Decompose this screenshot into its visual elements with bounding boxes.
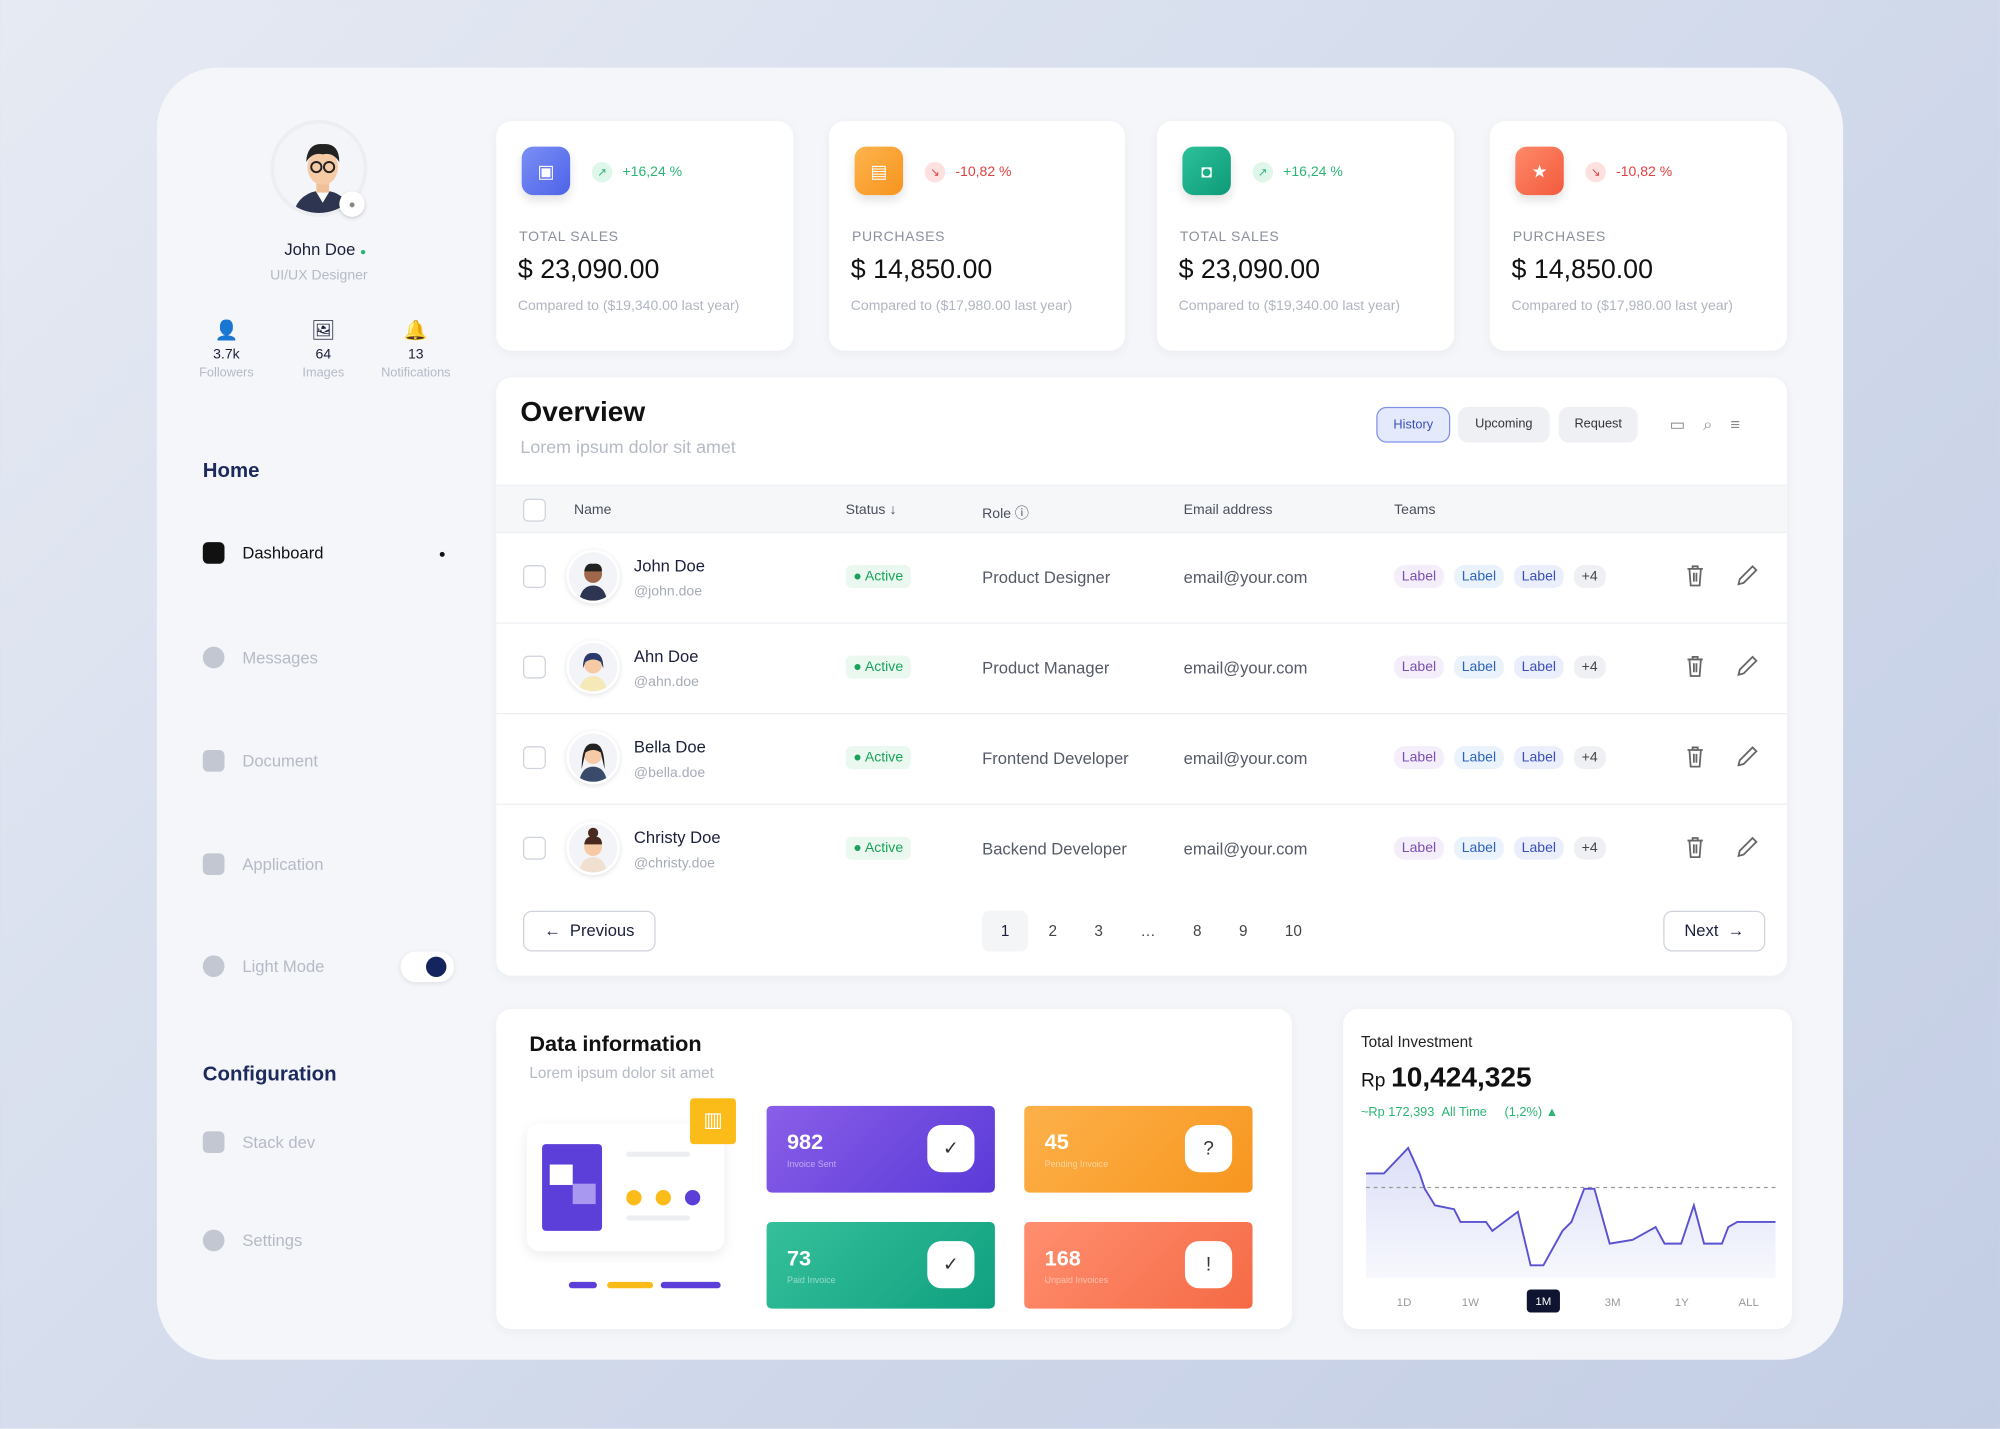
nav: application: [202, 853, 323, 875]
row: Bella Doe: @bella.doe: [634, 765, 705, 781]
profile stats: 🖼: [311, 320, 335, 342]
stat card 2: PURCHASES: [852, 230, 945, 245]
stat card 2: -10,82 %: [955, 165, 1012, 180]
row: John Doe: +4: [1582, 569, 1598, 584]
stat card 4: $ 14,850.00: [1511, 255, 1653, 284]
stat card 3: ↗: [1258, 166, 1268, 179]
stat card 4: Compared to ($17,980.00 last year): [1511, 298, 1733, 314]
heading: configuration: Configuration: [203, 1064, 337, 1085]
row: Christy Doe: ● Active: [853, 841, 903, 856]
sidebar profile: UI/UX Designer: [270, 268, 368, 283]
stat card 1: $ 23,090.00: [518, 255, 659, 284]
nav: messages: [202, 646, 318, 668]
row: Christy Doe: Label: [1522, 841, 1556, 856]
range tabs: 1D: [1397, 1296, 1411, 1309]
profile stats: Images: [302, 366, 344, 380]
stat card 2: [829, 121, 1125, 351]
overview title: Overview: [520, 395, 645, 427]
table header: Teams: [1394, 503, 1435, 518]
nav: document: Document: [242, 751, 318, 770]
nav: dashboard: Dashboard: [242, 543, 323, 562]
stat card 1: ▣: [537, 161, 554, 181]
name: John Doe ●: [284, 240, 366, 259]
row: Ahn Doe: email@your.com: [1184, 658, 1307, 677]
table header: Email address: [1184, 503, 1273, 518]
row: Christy Doe: +4: [1582, 841, 1598, 856]
nav: settings: Settings: [242, 1231, 302, 1250]
stat card 3: [1157, 121, 1454, 351]
metric: invoice sent: Invoice Sent: [787, 1161, 836, 1170]
stat card 3: TOTAL SALES: [1180, 230, 1279, 245]
panel: total investment: ALL: [1739, 1296, 1759, 1309]
sidebar profile: ●: [349, 198, 356, 210]
stat card 1: [496, 121, 793, 351]
profile stats: 3.7k: [213, 347, 240, 362]
nav: light mode: Light Mode: [242, 957, 324, 976]
main container: [157, 68, 1843, 1360]
nav: stack dev: [202, 1131, 315, 1153]
stat card 3: $ 23,090.00: [1179, 255, 1320, 284]
panel: total investment: 1Y: [1675, 1296, 1689, 1309]
stat card 3: ◘: [1201, 161, 1212, 181]
metric: invoice sent: 982: [787, 1130, 823, 1154]
stat card 3: Compared to ($19,340.00 last year): [1179, 298, 1400, 314]
metric: paid: ✓: [943, 1254, 959, 1276]
panel: data information: Data information: [529, 1032, 702, 1056]
metric: invoice sent: ✓: [943, 1138, 959, 1159]
panel: total investment: Rp 10,424,325: [1361, 1061, 1532, 1093]
metric: unpaid: !: [1206, 1254, 1211, 1276]
stat card 1: Compared to ($19,340.00 last year): [518, 298, 739, 314]
row: Bella Doe: Frontend Developer: [982, 749, 1129, 768]
row: Bella Doe: Label: [1402, 750, 1436, 765]
profile stats: 64: [316, 347, 331, 362]
row: John Doe: email@your.com: [1184, 568, 1307, 587]
panel: total investment: Total Investment: [1361, 1033, 1472, 1051]
profile stats: Notifications: [381, 366, 451, 380]
table header: [496, 485, 1787, 533]
panel: overview table: 2 3 … 8 9 10: [1048, 922, 1302, 940]
row: Christy Doe: [523, 824, 1758, 878]
row: Bella Doe: +4: [1582, 750, 1598, 765]
row: John Doe: ● Active: [853, 569, 903, 584]
panel: total investment: 1W: [1462, 1296, 1479, 1309]
illustration: [526, 1098, 736, 1288]
metric: pending: ?: [1203, 1138, 1214, 1159]
panel: overview table: ▭⌕≡: [1670, 415, 1758, 434]
row: Ahn Doe: Label: [1522, 659, 1556, 675]
row: Ahn Doe: @ahn.doe: [634, 675, 699, 690]
row: Ahn Doe: Product Manager: [982, 658, 1109, 677]
line chart: [1366, 1146, 1776, 1278]
panel: data information: Lorem ipsum dolor sit amet: [529, 1064, 714, 1082]
metric: paid: 73: [787, 1246, 811, 1270]
row: John Doe: Label: [1402, 569, 1436, 584]
text: ●: [439, 547, 446, 559]
stat card 4: PURCHASES: [1513, 230, 1606, 245]
row: Ahn Doe: +4: [1582, 659, 1598, 675]
stat card 2: ▤: [870, 161, 887, 181]
pagination: [523, 911, 656, 952]
row: Ahn Doe: [496, 624, 1787, 714]
metric: invoice sent: [767, 1106, 995, 1193]
row: John Doe: John Doe: [634, 556, 705, 575]
panel: total investment: 3M: [1605, 1296, 1621, 1309]
panel: total investment: 1M: [1535, 1295, 1551, 1307]
panel: total investment: ~Rp 172,393 All Time (1,2%) ▲: [1361, 1106, 1558, 1120]
nav: stack dev: Stack dev: [242, 1133, 315, 1152]
pagination: ← Previous: [544, 921, 634, 940]
row: John Doe: Label: [1462, 569, 1496, 584]
profile stats: 13: [408, 347, 424, 362]
stat card 1: +16,24 %: [622, 165, 682, 180]
stat card 2: Compared to ($17,980.00 last year): [851, 298, 1072, 314]
row: Ahn Doe: Ahn Doe: [634, 647, 698, 666]
sidebar profile: [270, 144, 368, 283]
profile stats: 👤: [214, 320, 238, 342]
panel: overview table: Lorem ipsum dolor sit amet: [520, 436, 736, 457]
stat card 2: ↘: [930, 166, 940, 179]
row: Bella Doe: Label: [1462, 750, 1496, 765]
panel: overview table: [496, 378, 1787, 976]
row: Bella Doe: ● Active: [853, 750, 903, 765]
metric: unpaid: 168: [1045, 1246, 1081, 1270]
stat card 4: -10,82 %: [1616, 165, 1672, 180]
metric: unpaid: Unpaid Invoices: [1045, 1277, 1108, 1286]
row: John Doe: @john.doe: [634, 584, 702, 599]
nav: messages: Messages: [242, 648, 318, 667]
stat card 4: ★: [1532, 161, 1548, 181]
metric: paid: [767, 1222, 995, 1309]
metric: pending: Pending Invoice: [1045, 1161, 1108, 1170]
table header: Status ↓: [846, 503, 896, 518]
row: Bella Doe: [496, 714, 1787, 805]
tabs: History: [1393, 418, 1433, 432]
panel: total investment: [1343, 1009, 1792, 1329]
metric: pending: 45: [1045, 1130, 1069, 1154]
row: Bella Doe: Bella Doe: [634, 737, 706, 756]
row: Ahn Doe: Label: [1402, 659, 1436, 675]
toggle: [401, 952, 454, 982]
avatar: [270, 120, 367, 217]
row: Christy Doe: email@your.com: [1184, 839, 1307, 858]
row: John Doe: [496, 533, 1787, 624]
profile stats: [199, 320, 451, 380]
row: Bella Doe: email@your.com: [1184, 749, 1307, 768]
stat card 3: +16,24 %: [1283, 165, 1343, 180]
row: Christy Doe: Label: [1402, 841, 1436, 856]
stat card 1: ↗: [597, 166, 607, 179]
nav: settings: [202, 1230, 302, 1252]
illustration: ▥: [703, 1110, 723, 1131]
metric: unpaid: [1024, 1222, 1253, 1309]
row: Christy Doe: Label: [1462, 841, 1496, 856]
nav: application: Application: [242, 855, 323, 874]
row: Christy Doe: @christy.doe: [634, 856, 715, 871]
metric: pending: [1024, 1106, 1253, 1193]
row: Bella Doe: Label: [1522, 750, 1556, 765]
tabs: [1376, 407, 1450, 443]
stat card 4: [1490, 121, 1787, 351]
row: Ahn Doe: ● Active: [853, 659, 903, 675]
row: John Doe: Product Designer: [982, 568, 1110, 587]
metric: paid: Paid Invoice: [787, 1277, 836, 1286]
stat card 2: $ 14,850.00: [851, 255, 992, 284]
table header: Name: [574, 503, 611, 518]
profile stats: 🔔: [404, 320, 428, 342]
panel: overview table: 1: [1001, 922, 1009, 940]
row: Ahn Doe: Label: [1462, 659, 1496, 675]
row: Christy Doe: Christy Doe: [634, 828, 721, 847]
table header: Role ⓘ: [982, 506, 1029, 522]
profile stats: Followers: [199, 366, 254, 380]
panel: overview table: Next →: [1684, 921, 1744, 940]
nav: dashboard: [202, 542, 446, 564]
panel: overview table: Request: [1574, 417, 1622, 431]
panel: data information: [496, 1009, 1292, 1329]
row: Christy Doe: Backend Developer: [982, 839, 1127, 858]
stat card 1: TOTAL SALES: [519, 230, 619, 245]
panel: overview table: Upcoming: [1475, 417, 1533, 431]
row: John Doe: Label: [1522, 569, 1556, 584]
nav: light mode: [202, 955, 324, 977]
heading: Home: Home: [203, 460, 260, 482]
nav: document: [202, 750, 318, 772]
stat card 4: ↘: [1591, 166, 1600, 179]
